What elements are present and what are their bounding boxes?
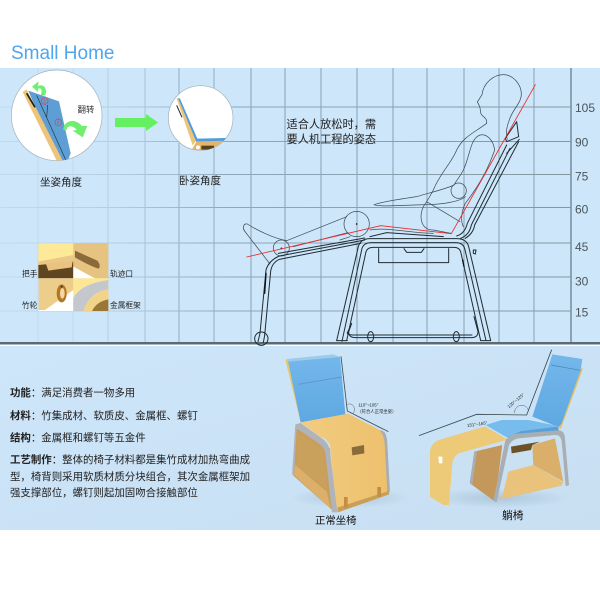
label: seated angle: 坐姿角度 — [40, 176, 82, 188]
baseline — [0, 342, 600, 344]
details grid: 竹轮 — [22, 300, 38, 310]
axis labels: 105 — [575, 101, 595, 115]
chair render: normal chair: （符合人正常坐姿） — [357, 408, 396, 415]
axis labels: 15 — [575, 306, 589, 320]
text: specs — [10, 386, 250, 499]
circle detail: seated angle: 2 — [57, 120, 60, 125]
label: recliner: 躺椅 — [502, 508, 524, 522]
details grid: 金属框架 — [110, 300, 141, 310]
text: specs: 强支撑部位，螺钉则起加固吻合接触部位 — [10, 486, 198, 499]
text: specs: 功能：满足消费者一物多用 — [10, 386, 135, 399]
circle detail: seated angle — [11, 70, 102, 163]
chair render: recliner: 151°~165° — [467, 420, 488, 428]
detail: handle — [38, 243, 73, 278]
red angle lines — [247, 85, 535, 257]
axis labels — [575, 101, 595, 320]
text: specs: 材料：竹集成材、软质皮、金属框、螺钉 — [10, 409, 198, 422]
axis labels: 30 — [575, 274, 589, 288]
detail: track — [73, 243, 108, 278]
chair render: normal chair — [285, 354, 396, 512]
axis labels: 60 — [575, 202, 589, 216]
label: reclined angle: 卧姿角度 — [179, 174, 221, 187]
detail: bamboo wheel — [39, 278, 73, 311]
axis labels: 75 — [575, 170, 589, 184]
annotation — [286, 117, 376, 146]
label: normal chair: 正常坐椅 — [315, 514, 357, 527]
chair render: recliner — [419, 350, 583, 505]
text: specs: 结构：金属框和螺钉等五金件 — [10, 431, 146, 444]
axis labels: 90 — [575, 136, 589, 150]
grid — [0, 68, 571, 343]
chair frame — [255, 122, 519, 345]
circle detail: reclined angle — [168, 86, 233, 152]
axis labels: 45 — [575, 240, 589, 254]
details grid — [22, 243, 141, 311]
chair and figure line drawing — [243, 75, 535, 345]
panel: description — [0, 346, 600, 530]
title: Small Home — [11, 43, 114, 64]
panel: ergonomics drawing — [0, 68, 600, 344]
circle detail: seated angle: 翻转 — [78, 104, 94, 114]
circle detail: seated angle: 1 — [43, 99, 46, 104]
annotation: 适合人放松时，需 — [286, 117, 376, 131]
details grid: 轨迹口 — [110, 268, 133, 278]
text: specs: 型，椅背则采用软质材质分块组合，其次金属框架加 — [10, 470, 250, 483]
text: specs: 工艺制作：整体的椅子材料都是集竹成材加热弯曲成 — [10, 453, 250, 466]
annotation: 要人机工程的姿态 — [286, 132, 376, 146]
details grid: 把手 — [22, 268, 38, 278]
chair render: recliner: 120°~125° — [506, 392, 525, 409]
human figure — [243, 75, 521, 264]
detail: metal frame — [73, 278, 108, 311]
chair render: normal chair: 110°~105° — [358, 402, 379, 407]
arrow: green — [115, 114, 158, 131]
